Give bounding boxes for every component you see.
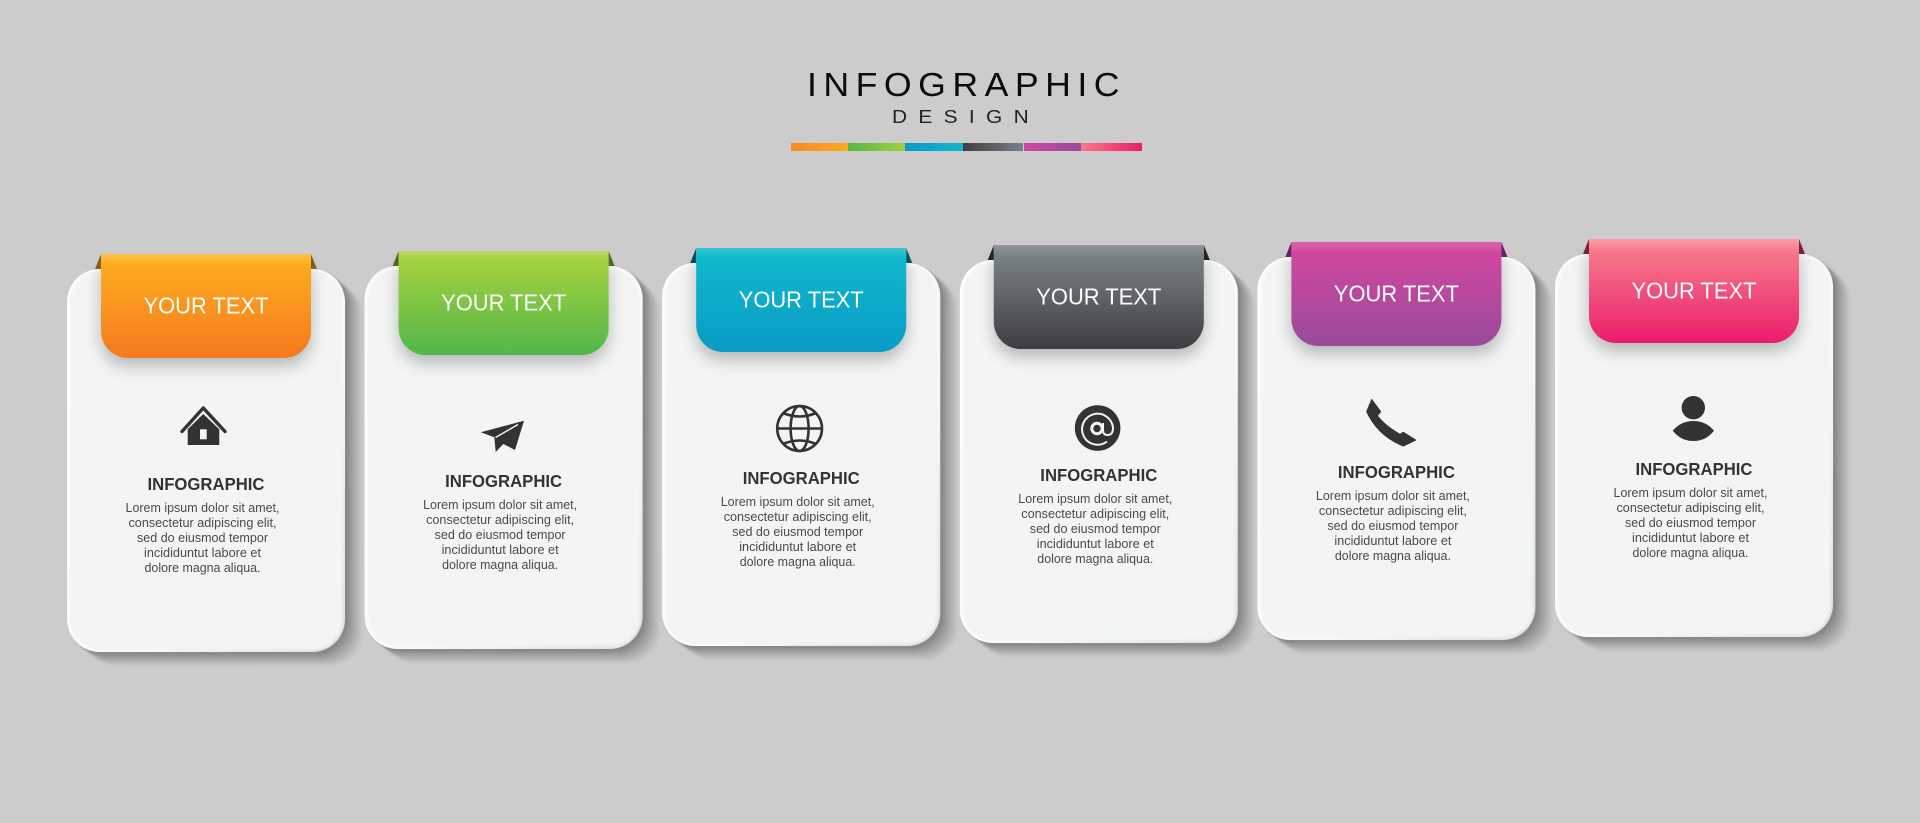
body text: card 5: Lorem ipsum dolor sit amet, <box>1316 488 1470 503</box>
body text: card 1: incididuntut labore et <box>144 545 261 560</box>
heading: INFOGRAPHIC: INFOGRAPHIC <box>807 66 1126 103</box>
ribbon: green <box>399 251 609 355</box>
panel: card 2 green <box>365 251 661 663</box>
heading: card 5: INFOGRAPHIC <box>1338 462 1455 482</box>
body text: card 6: dolore magna aliqua. <box>1632 545 1748 560</box>
icon: telephone <box>1367 400 1416 446</box>
ribbon: pink: YOUR TEXT <box>1632 278 1756 304</box>
icon: at sign <box>1075 405 1120 451</box>
body text: card 2 <box>423 497 577 572</box>
ribbon: orange: YOUR TEXT <box>144 292 268 318</box>
body text: card 3: incididuntut labore et <box>739 539 857 554</box>
ribbon: blue <box>696 248 906 352</box>
ribbon: blue: YOUR TEXT <box>739 286 864 312</box>
body text: card 1: sed do eiusmod tempor <box>137 530 269 545</box>
body text: card 3: consectetur adipiscing elit, <box>724 509 872 524</box>
body text: card 1 <box>126 500 280 575</box>
body text: card 4: Lorem ipsum dolor sit amet, <box>1018 491 1172 506</box>
panel: card 6 pink <box>1555 239 1851 651</box>
heading: card 4: INFOGRAPHIC <box>1040 465 1158 485</box>
body text: card 4: incididuntut labore et <box>1037 536 1154 551</box>
icon: house <box>182 408 225 445</box>
body text: card 2: dolore magna aliqua. <box>442 557 558 572</box>
body text: card 2: Lorem ipsum dolor sit amet, <box>423 497 577 512</box>
icon: paper plane <box>481 421 524 452</box>
subheading: DESIGN: DESIGN <box>892 106 1040 127</box>
body text: card 5: sed do eiusmod tempor <box>1327 518 1459 533</box>
body text: card 3 <box>721 494 875 569</box>
ribbon: grey <box>994 245 1204 349</box>
body text: card 5 <box>1316 488 1470 563</box>
panel: card 1 orange <box>67 254 363 666</box>
body text: card 3: Lorem ipsum dolor sit amet, <box>721 494 875 509</box>
panel: card 3 blue <box>662 248 958 660</box>
ribbon: purple: YOUR TEXT <box>1334 280 1459 306</box>
body text: card 4 <box>1018 491 1172 566</box>
body text: card 3: sed do eiusmod tempor <box>732 524 864 539</box>
icon: globe <box>777 406 822 451</box>
ribbon: orange <box>101 254 311 358</box>
body text: card 6: Lorem ipsum dolor sit amet, <box>1614 485 1768 500</box>
body text: card 2: consectetur adipiscing elit, <box>426 512 574 527</box>
body text: card 4: consectetur adipiscing elit, <box>1021 506 1169 521</box>
body text: card 5: consectetur adipiscing elit, <box>1319 503 1467 518</box>
body text: card 3: dolore magna aliqua. <box>740 554 856 569</box>
body text: card 4: sed do eiusmod tempor <box>1030 521 1161 536</box>
heading: card 3: INFOGRAPHIC <box>743 468 860 488</box>
heading: card 1: INFOGRAPHIC <box>148 474 265 494</box>
body text: card 4: dolore magna aliqua. <box>1037 551 1153 566</box>
panel: card 5 purple <box>1257 242 1553 654</box>
body text: card 1: Lorem ipsum dolor sit amet, <box>126 500 280 515</box>
body text: card 1: consectetur adipiscing elit, <box>128 515 276 530</box>
ribbon: pink <box>1589 239 1799 343</box>
ribbon: purple <box>1291 242 1501 346</box>
ribbon: grey: YOUR TEXT <box>1036 284 1161 310</box>
body text: card 2: incididuntut labore et <box>442 542 559 557</box>
title block <box>791 66 1142 151</box>
panel: card 4 grey <box>960 245 1256 657</box>
icon: person <box>1673 396 1714 441</box>
body text: card 6: consectetur adipiscing elit, <box>1616 500 1764 515</box>
body text: card 6: sed do eiusmod tempor <box>1625 515 1757 530</box>
ribbon: green: YOUR TEXT <box>441 290 566 316</box>
body text: card 6: incididuntut labore et <box>1632 530 1749 545</box>
colour bar <box>791 143 1142 151</box>
body text: card 5: incididuntut labore et <box>1334 533 1452 548</box>
body text: card 6 <box>1614 485 1768 560</box>
body text: card 5: dolore magna aliqua. <box>1335 548 1451 563</box>
body text: card 1: dolore magna aliqua. <box>144 560 260 575</box>
heading: card 2: INFOGRAPHIC <box>445 471 562 491</box>
body text: card 2: sed do eiusmod tempor <box>435 527 566 542</box>
heading: card 6: INFOGRAPHIC <box>1636 459 1753 479</box>
